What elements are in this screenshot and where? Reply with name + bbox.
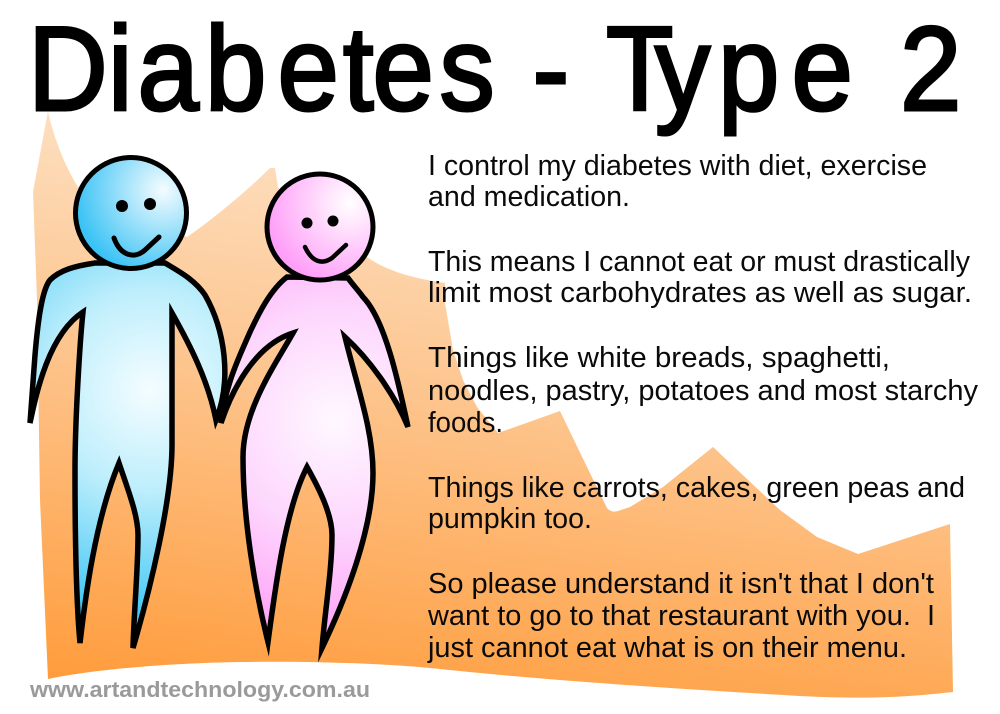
pink left eye: [302, 218, 312, 228]
blue head: [76, 158, 186, 268]
orange background mountain shape: [33, 111, 953, 698]
paragraph: starchy foods: Things like white breads, spaghetti,: [428, 342, 890, 374]
paragraph: carrots, cakes, peas, pumpkin: Things like carrots, cakes, green peas and: [428, 472, 965, 504]
paragraph: starchy foods: noodles, pastry, potatoes and most starchy: [428, 375, 979, 407]
pink body: [221, 277, 408, 648]
paragraph: starchy foods: foods.: [428, 407, 503, 439]
text block: explanation: [427, 150, 979, 664]
blue smile: [114, 237, 159, 255]
pink smile: [305, 245, 346, 262]
paragraph: diet, exercise and medication: [428, 150, 927, 213]
pink head: [267, 174, 373, 280]
paragraph: carrots, cakes, peas, pumpkin: pumpkin too.: [428, 503, 592, 535]
paragraph: restaurant: just cannot eat what is on their menu.: [427, 632, 907, 664]
figure: pink person: [221, 174, 408, 648]
paragraph: limit carbohydrates: This means I cannot eat or must drastically: [428, 246, 971, 278]
paragraph: diet, exercise and medication: I control my diabetes with diet, exercise: [428, 150, 927, 182]
blue body: [30, 263, 225, 648]
figure: blue person: [30, 158, 225, 648]
pink right eye: [328, 216, 338, 226]
paragraph: restaurant: So please understand it isn't that I don't: [428, 568, 934, 600]
paragraph: limit carbohydrates: [428, 246, 972, 309]
paragraph: diet, exercise and medication: and medication.: [428, 181, 630, 213]
blue right eye: [144, 198, 156, 210]
title: Diabetes - Type 2: [28, 3, 961, 136]
paragraph: starchy foods: [428, 342, 979, 439]
website url: www.artandtechnology.com.au: [29, 677, 370, 702]
blue left eye: [116, 200, 128, 212]
paragraph: carrots, cakes, peas, pumpkin: [428, 472, 965, 535]
paragraph: restaurant: [427, 568, 935, 664]
paragraph: limit carbohydrates: limit most carbohydrates as well as sugar.: [428, 277, 972, 309]
paragraph: restaurant: want to go to that restaurant with you. I: [427, 600, 935, 632]
